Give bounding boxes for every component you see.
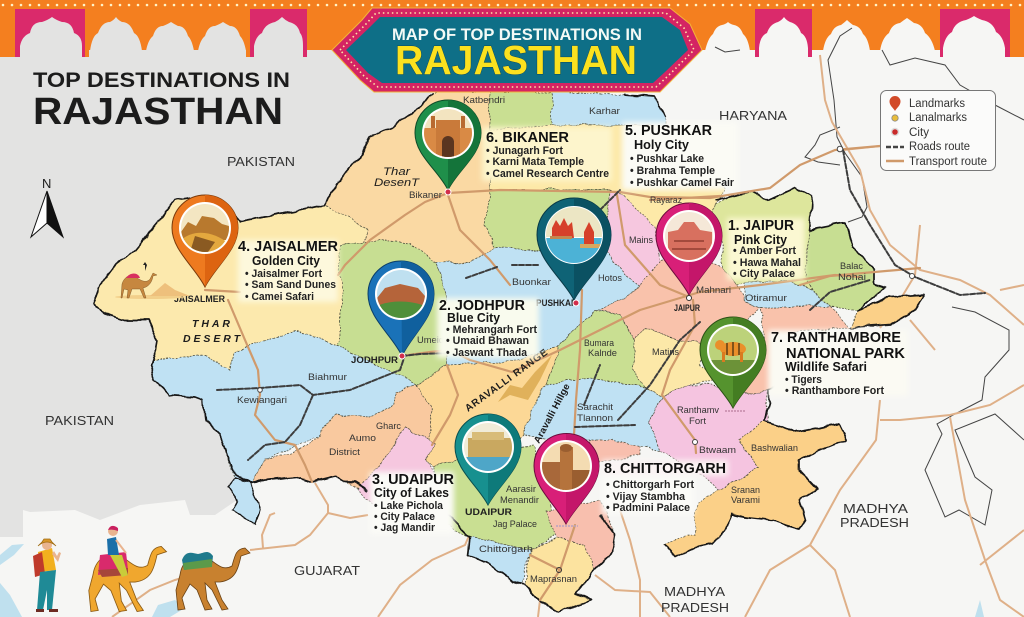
place names on map: Aumo <box>349 433 376 444</box>
small camel in desert <box>115 262 190 299</box>
place names on map: Buonkar <box>512 277 551 288</box>
place names on map: Hotos <box>598 273 622 284</box>
label: 4 Jaisalmer: • Camei Safari <box>245 291 314 303</box>
region: Maprasnan yellow <box>525 538 595 612</box>
label: 6 Bikaner <box>482 127 612 181</box>
region: Jaipur salmon <box>600 255 760 344</box>
place names on map: Aravalli Hillge <box>532 382 573 445</box>
place names on map: ARAVALLI RANGE <box>463 347 551 414</box>
label: 2 Jodhpur: • Umaid Bhawan <box>446 335 529 347</box>
legend labels: Lanalmarks <box>909 112 967 124</box>
region: Jodhpur green <box>335 240 447 385</box>
title: top destinations <box>33 69 290 133</box>
place names on map: PUSHKAR <box>536 298 577 309</box>
place names on map: Jag Palace <box>493 519 537 530</box>
label: 2 Jodhpur: • Mehrangarh Fort <box>446 324 537 336</box>
region: Jaisalmer <box>93 197 367 370</box>
region: Pakistan <box>0 0 432 537</box>
label: 6 Bikaner: 6. BIKANER <box>486 129 569 146</box>
marker: north junction <box>837 146 843 152</box>
label: 6 Bikaner: • Camel Research Centre <box>486 168 609 180</box>
label: 8 Chittorgarh: • Vijay Stambha <box>606 491 686 503</box>
decorative top border <box>0 0 1024 58</box>
pin: Pushkar <box>537 198 611 306</box>
place names on map: Katbendri <box>463 95 505 106</box>
title banner <box>332 8 702 92</box>
label: 5 Pushkar: Holy City <box>634 138 689 152</box>
pin: Jaisalmer <box>172 195 238 287</box>
place names on map: Mahnari <box>696 285 731 296</box>
region: Ranthambore pink <box>649 384 769 490</box>
place names on map: Thar <box>383 166 412 178</box>
pin: Bikaner <box>415 100 481 195</box>
region: Bumara green <box>545 310 645 387</box>
label: 1 Jaipur: • Hawa Mahal <box>733 257 801 269</box>
label: 8 Chittorgarh: • Chittorgarh Fort <box>606 479 694 491</box>
label: 7 Ranthambore <box>768 329 908 397</box>
region: Aumo peach <box>252 385 432 488</box>
pin: Jodhpur <box>368 261 434 359</box>
legend labels <box>909 98 987 168</box>
traveller <box>33 539 61 612</box>
label: 8 Chittorgarh <box>602 460 728 514</box>
place names on map: Gharc <box>376 421 401 432</box>
place names on map: Bikaner <box>409 190 442 201</box>
place names on map: Rayaraz <box>650 195 682 206</box>
place names on map: JAIPUR <box>674 303 700 314</box>
place names on map: GUJARAT <box>294 563 360 578</box>
place names on map: Matins <box>652 347 679 358</box>
place names on map: Menandir <box>500 495 539 506</box>
place names on map: Nohai <box>838 272 866 283</box>
place names on map: UDAIPUR <box>465 507 512 518</box>
camel with rider <box>89 526 166 612</box>
region: Chittorgarh salmon <box>545 500 615 570</box>
label: 7 Ranthambore: NATIONAL PARK <box>786 345 905 362</box>
legend labels: City <box>909 127 929 139</box>
label: 8 Chittorgarh: 8. CHITTORGARH <box>604 460 726 477</box>
title: top destinations: RAJASTHAN <box>33 91 283 133</box>
place names on map: Bumara <box>584 338 615 349</box>
place names on map: JODHPUR <box>351 355 398 366</box>
label: 7 Ranthambore: • Ranthambore Fort <box>785 385 884 397</box>
place names on map: Tlannon <box>577 413 613 424</box>
region: Udaipur pink <box>358 428 445 520</box>
place names on map: DesenT <box>374 177 420 189</box>
pin: Ranthambore <box>700 317 766 411</box>
label: 5 Pushkar: • Brahma Temple <box>630 165 715 177</box>
label: 5 Pushkar <box>622 122 738 190</box>
region: central green <box>485 190 609 250</box>
water bodies <box>0 544 984 617</box>
region: top yellow <box>490 125 725 240</box>
marker: Btwaam junction <box>692 440 698 444</box>
label: 4 Jaisalmer: • Jaisalmer Fort <box>245 268 322 280</box>
place names on map: JAISALMER <box>174 294 225 305</box>
label: 6 Bikaner: • Karni Mata Temple <box>486 156 584 168</box>
place names on map <box>45 95 909 615</box>
label: 4 Jaisalmer: • Sam Sand Dunes <box>245 279 336 291</box>
label: 1 Jaipur: • City Palace <box>733 268 795 280</box>
place names on map: Ranthamv <box>677 405 719 416</box>
legend labels: Landmarks <box>909 98 965 110</box>
label: 3 Udaipur: • City Palace <box>374 511 435 523</box>
pin: Chittorgarh <box>534 434 599 526</box>
label: 5 Pushkar: • Pushkar Camel Fair <box>630 177 735 189</box>
region: Matins yellow <box>632 328 715 397</box>
region: Udaipur green <box>433 445 558 550</box>
place names on map: Fort <box>689 416 706 427</box>
place names on map: Balac <box>840 261 863 272</box>
place names on map: Btwaam <box>699 445 736 456</box>
label: 4 Jaisalmer: Golden City <box>252 254 320 268</box>
region: east green <box>805 223 885 310</box>
place names on map: Aarasir <box>506 484 536 495</box>
place names on map: Otiramur <box>745 293 787 304</box>
place names on map: Bashwalian <box>751 443 798 454</box>
region: Barmer blue <box>150 330 415 483</box>
Gujarat border and Kutch <box>228 478 260 525</box>
region: east orange <box>850 295 925 328</box>
camel with saddle <box>176 548 250 610</box>
place names on map: Umeid <box>417 335 444 346</box>
map of Rajasthan districts <box>93 92 925 612</box>
title banner: MAP OF TOP DESTINATIONS IN <box>392 25 642 44</box>
region: Sawai Madhopur orange <box>664 420 847 557</box>
marker: Kewiangari junction <box>258 388 262 392</box>
region: Pushkar blue <box>437 247 640 365</box>
north arrow: N <box>42 176 51 191</box>
place names on map: Karhar <box>589 106 620 117</box>
label: 2 Jodhpur <box>437 297 539 359</box>
place names on map: MADHYA <box>843 501 908 516</box>
label: 8 Chittorgarh: • Padmini Palace <box>606 502 690 514</box>
pin: Jaipur <box>656 203 722 300</box>
label: 2 Jodhpur: 2. JODHPUR <box>439 297 525 314</box>
label: 3 Udaipur: 3. UDAIPUR <box>372 471 454 488</box>
label: 1 Jaipur <box>727 217 805 280</box>
region: Sarachit blue <box>525 378 662 450</box>
title: top destinations: TOP DESTINATIONS IN <box>33 69 290 92</box>
place names on map: Chittorgarh <box>479 544 533 555</box>
region: top green <box>490 92 560 130</box>
place names on map: PAKISTAN <box>45 413 114 428</box>
place names on map: HARYANA <box>719 108 787 123</box>
label: 5 Pushkar: 5. PUSHKAR <box>625 122 712 139</box>
Aravalli hills sketch <box>498 355 552 402</box>
title banner: RAJASTHAN <box>395 37 637 83</box>
region: Karhar blue <box>552 92 665 125</box>
region: Bikaner <box>325 92 495 263</box>
place names on map: DESERT <box>183 333 242 345</box>
place names on map: Kewiangari <box>237 395 287 406</box>
place names on map: Kalnde <box>588 348 617 359</box>
place names on map: Varami <box>731 495 760 506</box>
place names on map: Maprasnan <box>530 574 577 585</box>
label: 7 Ranthambore: • Tigers <box>785 374 822 386</box>
label: 5 Pushkar: • Pushkar Lake <box>630 153 704 165</box>
place names on map: THAR <box>192 318 230 330</box>
pin: Udaipur <box>455 414 521 505</box>
label: 2 Jodhpur: Blue City <box>447 311 500 325</box>
road and transport routes inside the map <box>205 146 985 600</box>
label: 7 Ranthambore: Wildlife Safari <box>785 360 867 374</box>
label: 3 Udaipur: • Lake Pichola <box>374 500 444 512</box>
Rajasthan state outline <box>93 92 925 612</box>
label: 4 Jaisalmer <box>238 238 338 303</box>
place names on map: Mains <box>629 235 653 246</box>
label: 6 Bikaner: • Junagarh Fort <box>486 145 563 157</box>
legend labels: Transport route <box>909 156 987 168</box>
legend icon: city <box>892 128 898 136</box>
label: 3 Udaipur <box>370 471 454 534</box>
place names on map: MADHYA <box>664 584 725 599</box>
legend icon: landmark pin <box>890 96 900 111</box>
place names on map: PAKISTAN <box>227 154 295 169</box>
place names on map: Sarachit <box>577 402 613 413</box>
place names on map: Biahmur <box>308 372 347 383</box>
marker: east junction <box>910 274 914 278</box>
region: Mains pink <box>605 190 660 285</box>
legend icon: transport route <box>886 160 904 162</box>
label: 7 Ranthambore: 7. RANTHAMBORE <box>771 329 901 346</box>
label: 1 Jaipur: Pink City <box>734 233 787 247</box>
place names on map: Sranan <box>731 485 760 496</box>
label: 4 Jaisalmer: 4. JAISALMER <box>238 238 338 255</box>
place names on map: District <box>329 447 360 458</box>
small map markers <box>556 568 562 572</box>
region: Aravalli orange <box>415 345 558 467</box>
legend icon: roads route <box>886 146 904 148</box>
label: 3 Udaipur: City of Lakes <box>374 486 449 500</box>
region: south blue <box>468 537 558 584</box>
label: 3 Udaipur: • Jag Mandir <box>374 522 436 534</box>
label: 2 Jodhpur: • Jaswant Thada <box>446 347 528 359</box>
legend <box>880 90 996 170</box>
place names on map: PRADESH <box>661 600 729 615</box>
north arrow <box>31 176 63 237</box>
legend labels: Roads route <box>909 141 970 153</box>
region: Jaipur north green <box>708 188 812 290</box>
label: 1 Jaipur: • Amber Fort <box>733 245 796 257</box>
legend icon: landmark dot <box>892 115 898 121</box>
place names on map: PRADESH <box>840 515 909 530</box>
label: 1 Jaipur: 1. JAIPUR <box>728 217 794 234</box>
region: Otiramur blue <box>745 282 830 307</box>
